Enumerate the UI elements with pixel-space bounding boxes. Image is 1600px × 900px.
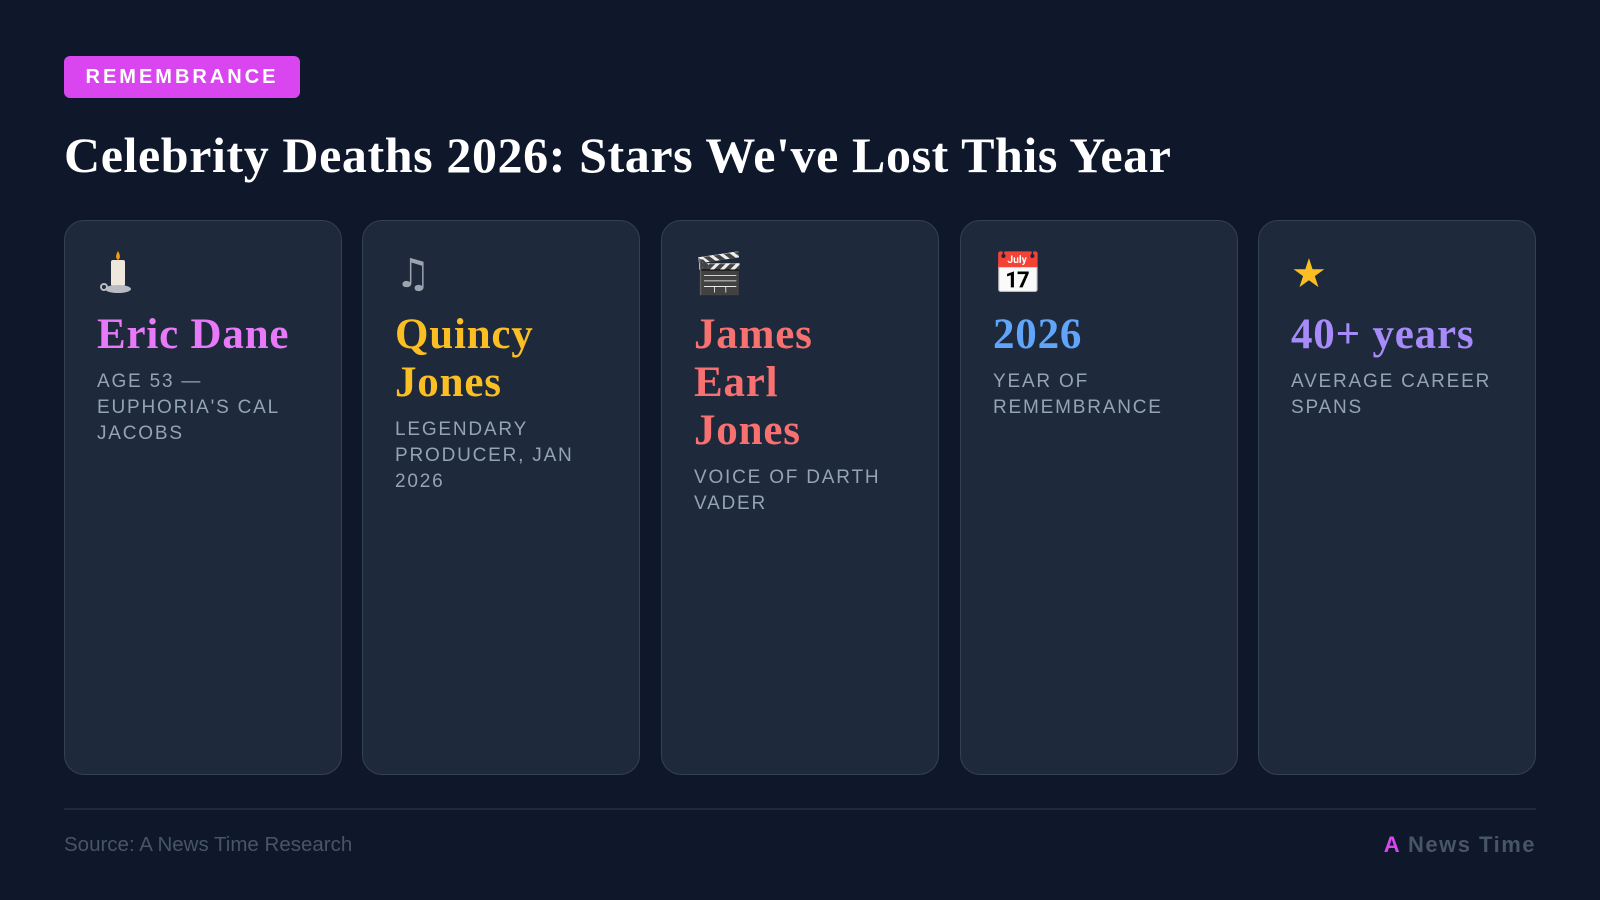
name: Jones <box>694 407 801 454</box>
subtitle: YEAR OF REMEMBRANCE <box>993 371 1163 418</box>
name: 40+ years <box>1291 311 1474 358</box>
icon: calendar: 📅 <box>993 251 1043 297</box>
subtitle: AVERAGE CAREER SPANS <box>1291 371 1491 418</box>
brand: A News Time <box>1384 832 1536 857</box>
name: Quincy Jones <box>395 311 534 406</box>
name <box>694 311 813 454</box>
name: Earl <box>694 359 778 406</box>
name: Eric Dane <box>97 311 289 358</box>
icon: music: ♫ <box>395 251 431 297</box>
name: 2026 <box>993 311 1082 358</box>
card: James Earl Jones <box>661 220 939 775</box>
badge: REMEMBRANCE <box>86 66 278 88</box>
icon: star: ★ <box>1291 251 1327 297</box>
icon: candle <box>100 251 131 293</box>
icon: clapper: 🎬 <box>694 251 744 297</box>
badge <box>64 56 300 98</box>
name: James <box>694 311 813 358</box>
subtitle: LEGENDARY PRODUCER, JAN 2026 <box>395 419 574 492</box>
title: Celebrity Deaths 2026: Stars We've Lost This Year <box>64 127 1172 183</box>
card: Quincy Jones <box>362 220 640 775</box>
card: Eric Dane <box>64 220 342 775</box>
card: 2026 <box>960 220 1238 775</box>
subtitle: VOICE OF DARTH VADER <box>694 467 880 514</box>
subtitle: AGE 53 — EUPHORIA'S CAL JACOBS <box>97 371 279 444</box>
source: Source: A News Time Research <box>64 833 352 856</box>
card: 40+ years <box>1258 220 1536 775</box>
